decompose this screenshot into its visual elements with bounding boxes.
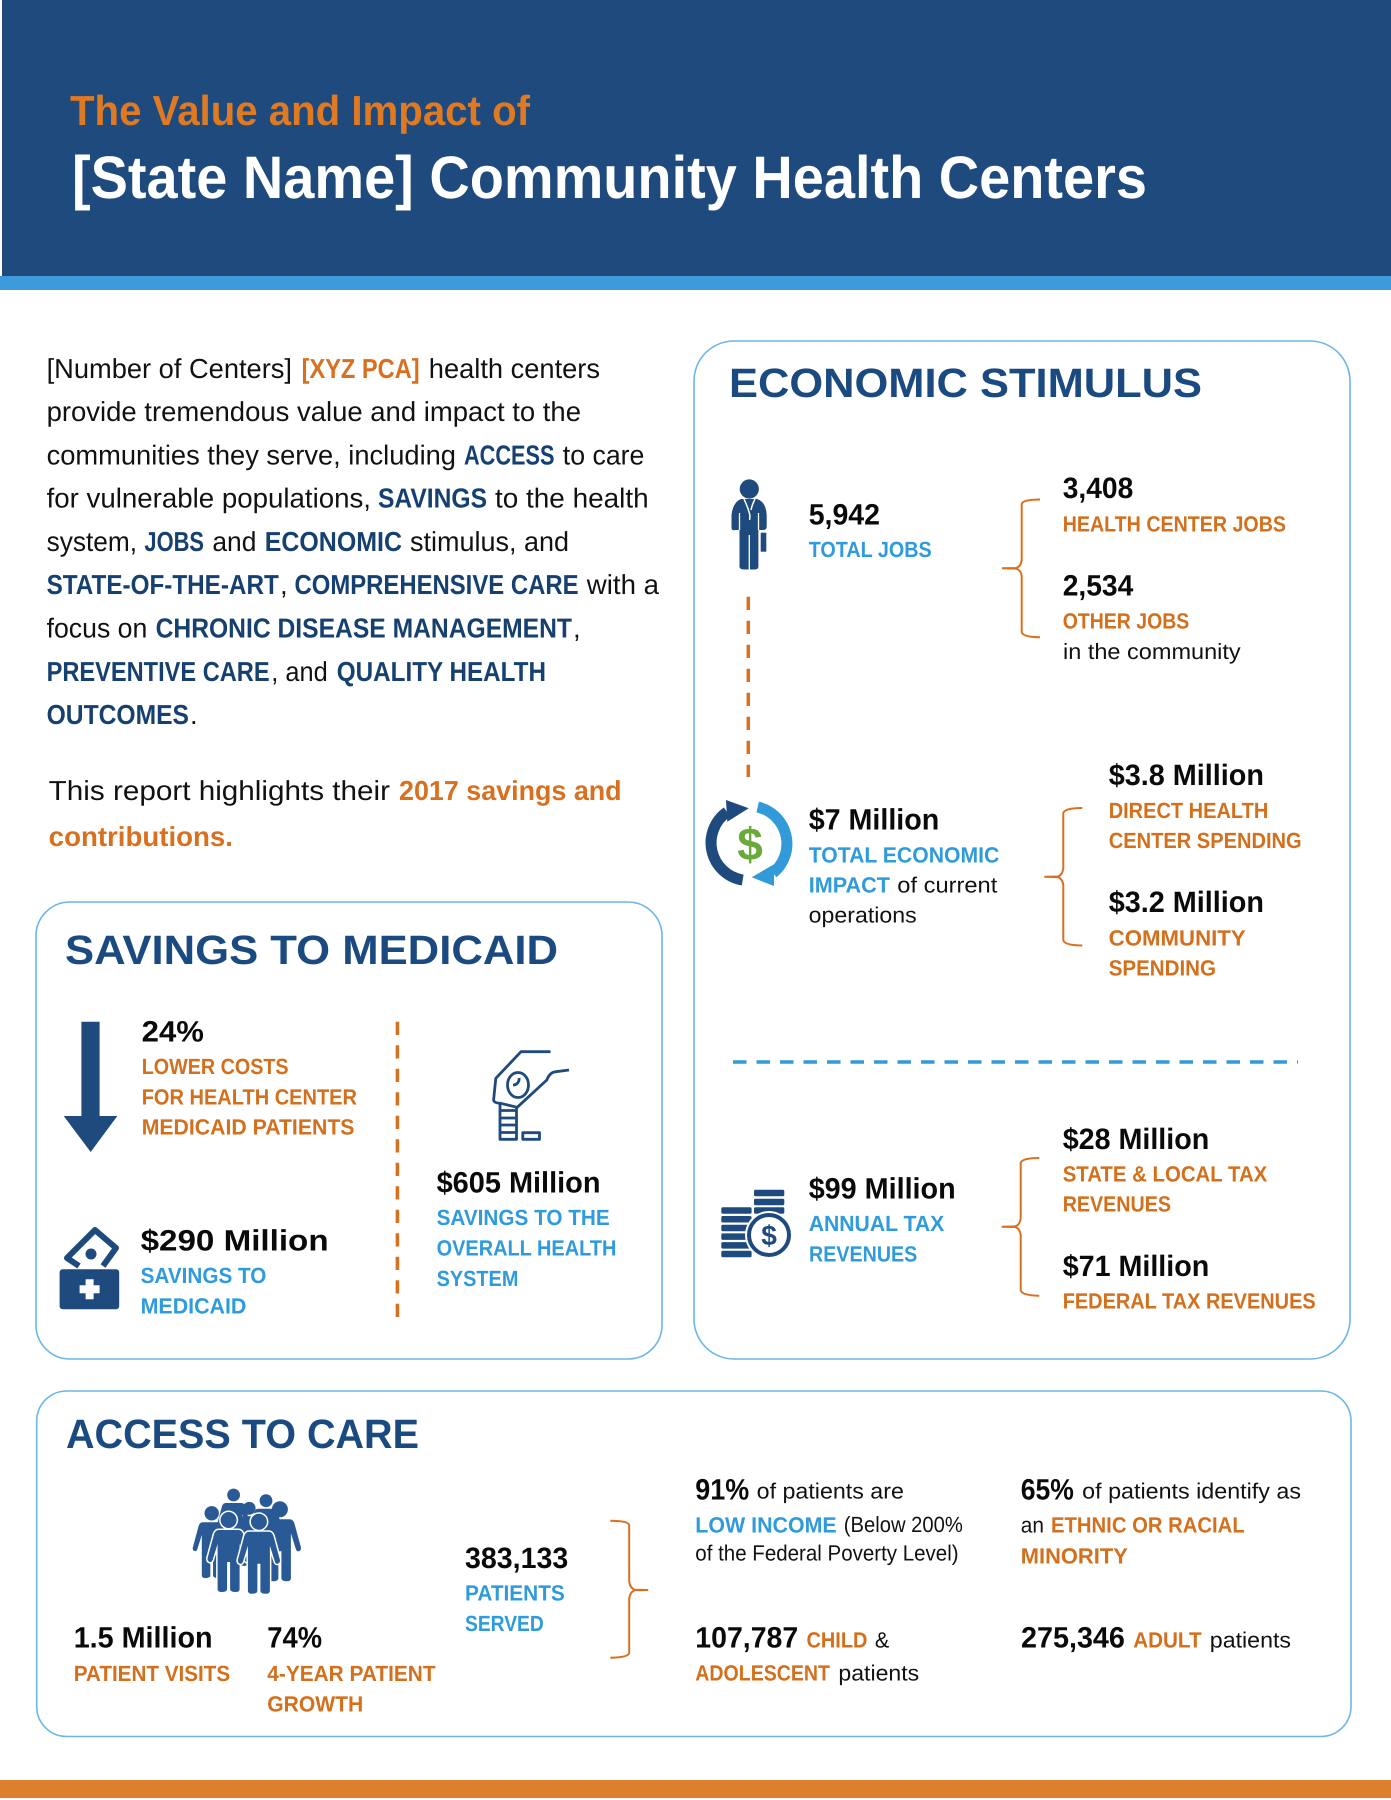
stat: annual tax revenues <box>809 1172 956 1266</box>
brace: tax revenues <box>1002 1158 1039 1296</box>
stat: patients served: 383,133 <box>465 1542 568 1575</box>
intro paragraph: provide tremendous value and impact to the <box>47 396 581 427</box>
icon: down arrow <box>64 1022 117 1152</box>
stat: community spending: SPENDING <box>1109 956 1216 981</box>
stat: minority <box>1021 1474 1301 1568</box>
stat: adult: ADULT <box>1133 1628 1202 1652</box>
stat: minority: 65% <box>1021 1474 1074 1506</box>
intro paragraph: [Number of Centers] <box>47 353 292 384</box>
stat: patients served: PATIENTS <box>465 1581 565 1606</box>
intro paragraph: PREVENTIVE CARE <box>47 656 270 687</box>
stat: total economic impact: of current <box>897 873 997 898</box>
intro paragraph: for vulnerable populations, <box>47 482 371 514</box>
intro paragraph: ECONOMIC <box>265 526 402 557</box>
stat: federal tax: $71 Million <box>1063 1250 1209 1283</box>
stat: patients served <box>465 1542 568 1636</box>
stat: minority: an <box>1021 1513 1044 1538</box>
stat: patient growth: 74% <box>267 1622 322 1654</box>
stat: federal tax <box>1063 1250 1316 1314</box>
intro paragraph: [XYZ PCA] <box>302 353 420 384</box>
stat: patient visits <box>74 1622 230 1686</box>
stat: 24% lower costs: FOR HEALTH CENTER <box>142 1084 357 1109</box>
stat: low income: LOW INCOME <box>695 1513 837 1538</box>
stat: direct spending: $3.8 Million <box>1109 759 1264 792</box>
icon: circular arrows with dollar <box>711 800 787 886</box>
stat: other jobs: 2,534 <box>1063 570 1134 603</box>
stat: child and adolescent <box>695 1622 919 1686</box>
stat: minority: ETHNIC OR RACIAL <box>1051 1513 1245 1538</box>
report highlight text: This report highlights their <box>49 775 390 806</box>
stat: child and adolescent: & <box>875 1628 890 1652</box>
panel: economic stimulus <box>694 341 1350 1359</box>
stat: total jobs <box>809 498 932 562</box>
intro paragraph: , <box>573 612 581 644</box>
stat: other jobs: in the community <box>1063 639 1241 664</box>
stat: low income: of patients are <box>757 1478 904 1504</box>
header banner <box>0 0 1391 290</box>
stat: total economic impact: TOTAL ECONOMIC <box>809 843 999 868</box>
stat: adult: patients <box>1210 1628 1291 1652</box>
stat: patient growth <box>267 1622 436 1716</box>
stat: $605 million <box>437 1167 616 1291</box>
intro paragraph: health centers <box>429 353 600 384</box>
stat: total economic impact: $7 Million <box>809 803 939 836</box>
intro paragraph: communities they serve, including <box>47 439 456 470</box>
report highlight text <box>49 775 622 852</box>
intro paragraph: JOBS <box>144 526 204 557</box>
panel: savings to medicaid <box>36 902 662 1359</box>
heading: access to care: ACCESS TO CARE <box>66 1411 419 1457</box>
intro paragraph: ACCESS <box>464 439 554 470</box>
stat: minority: MINORITY <box>1021 1543 1128 1568</box>
stat: child and adolescent: 107,787 <box>695 1622 798 1654</box>
intro paragraph: OUTCOMES <box>47 699 189 730</box>
stat: 24% lower costs <box>142 1016 357 1140</box>
stat: direct spending: DIRECT HEALTH <box>1109 798 1268 823</box>
intro paragraph: and <box>212 526 256 557</box>
stat: health center jobs: HEALTH CENTER JOBS <box>1063 511 1286 536</box>
intro paragraph: . <box>190 699 198 730</box>
panel: access to care <box>37 1391 1351 1736</box>
report highlight text: contributions. <box>49 821 233 852</box>
icon: health worker with briefcase <box>732 479 767 570</box>
stat: patient growth: GROWTH <box>267 1691 363 1716</box>
stat: $605 million: SYSTEM <box>437 1266 518 1291</box>
intro paragraph: SAVINGS <box>378 482 487 514</box>
stat: community spending: $3.2 Million <box>1109 886 1264 919</box>
stat: 24% lower costs: MEDICAID PATIENTS <box>142 1115 354 1140</box>
icon: coin stacks with dollar <box>721 1190 793 1259</box>
brace: patients <box>610 1521 648 1658</box>
intro paragraph <box>47 353 660 730</box>
footer bar <box>0 1780 1391 1798</box>
stat: annual tax revenues: $99 Million <box>809 1172 956 1205</box>
stat: state and local tax <box>1063 1123 1268 1217</box>
intro paragraph: with a <box>586 569 660 600</box>
stat: child and adolescent: ADOLESCENT <box>695 1661 830 1686</box>
intro paragraph: system, <box>47 526 137 557</box>
intro paragraph: to care <box>563 439 644 470</box>
stat: minority: of patients identify as <box>1082 1478 1301 1504</box>
icon: circular arrows with dollar: $ <box>737 818 763 870</box>
stat: low income <box>695 1474 963 1566</box>
stat: child and adolescent: patients <box>838 1661 919 1686</box>
stat: $605 million: $605 Million <box>437 1167 600 1200</box>
stat: $605 million: SAVINGS TO THE <box>437 1205 610 1230</box>
intro paragraph: to the health <box>495 482 649 514</box>
subtitle: The Value and Impact of <box>70 87 531 134</box>
stat: low income: (Below 200% <box>844 1512 963 1537</box>
stat: adult: 275,346 <box>1021 1622 1125 1654</box>
stat: direct spending <box>1109 759 1302 853</box>
stat: $290 million: $290 Million <box>141 1225 329 1258</box>
stat: patients served: SERVED <box>465 1611 544 1636</box>
stat: annual tax revenues: ANNUAL TAX <box>809 1211 945 1236</box>
stat: annual tax revenues: REVENUES <box>809 1241 917 1266</box>
icon: medical kit with bill <box>60 1230 119 1309</box>
stat: total jobs: TOTAL JOBS <box>809 537 932 562</box>
stat: $290 million <box>141 1225 329 1319</box>
intro paragraph: , and <box>271 656 328 687</box>
stat: total economic impact: operations <box>809 903 917 928</box>
report highlight text: 2017 savings and <box>399 775 622 806</box>
stat: direct spending: CENTER SPENDING <box>1109 828 1302 853</box>
icon: group of people <box>193 1489 301 1594</box>
icon: hand placing coin on stack <box>494 1052 569 1139</box>
stat: 24% lower costs: 24% <box>142 1016 204 1049</box>
brace: economic impact <box>1044 808 1082 946</box>
stat: 24% lower costs: LOWER COSTS <box>142 1054 289 1079</box>
stat: total economic impact <box>809 803 999 928</box>
stat: low income: of the Federal Poverty Level) <box>695 1541 959 1566</box>
stat: health center jobs <box>1063 472 1286 536</box>
intro paragraph: , <box>280 569 288 600</box>
stat: state and local tax: STATE & LOCAL TAX <box>1063 1161 1268 1186</box>
stat: $290 million: MEDICAID <box>141 1294 246 1319</box>
title: [State Name] Community Health Centers <box>72 144 1147 211</box>
stat: $290 million: SAVINGS TO <box>141 1263 266 1288</box>
heading: economic stimulus: ECONOMIC STIMULUS <box>729 360 1202 406</box>
stat: patient visits: PATIENT VISITS <box>74 1661 230 1686</box>
heading: savings to medicaid: SAVINGS TO MEDICAID <box>65 927 558 973</box>
stat: state and local tax: REVENUES <box>1063 1192 1171 1217</box>
stat: child and adolescent: CHILD <box>806 1628 867 1652</box>
intro paragraph: COMPREHENSIVE CARE <box>294 569 578 600</box>
intro paragraph: CHRONIC DISEASE MANAGEMENT <box>156 612 572 644</box>
stat: community spending <box>1109 886 1264 981</box>
intro paragraph: focus on <box>47 612 147 644</box>
stat: state and local tax: $28 Million <box>1063 1123 1209 1156</box>
stat: patient visits: 1.5 Million <box>74 1622 213 1654</box>
stat: low income: 91% <box>695 1474 749 1506</box>
stat: total economic impact: IMPACT <box>809 873 891 898</box>
stat: federal tax: FEDERAL TAX REVENUES <box>1063 1289 1316 1314</box>
intro paragraph: STATE-OF-THE-ART <box>47 569 279 600</box>
stat: patient growth: 4-YEAR PATIENT <box>267 1661 436 1686</box>
brace: jobs <box>1002 500 1040 637</box>
icon: coin stacks with dollar: $ <box>761 1220 777 1251</box>
stat: community spending: COMMUNITY <box>1109 925 1246 950</box>
stat: adult <box>1021 1622 1291 1654</box>
stat: other jobs: OTHER JOBS <box>1063 609 1189 634</box>
intro paragraph: stimulus, and <box>410 526 569 557</box>
stat: health center jobs: 3,408 <box>1063 472 1133 505</box>
intro paragraph: QUALITY HEALTH <box>337 656 546 687</box>
stat: total jobs: 5,942 <box>809 498 880 531</box>
stat: other jobs <box>1063 570 1241 664</box>
stat: $605 million: OVERALL HEALTH <box>437 1236 616 1261</box>
